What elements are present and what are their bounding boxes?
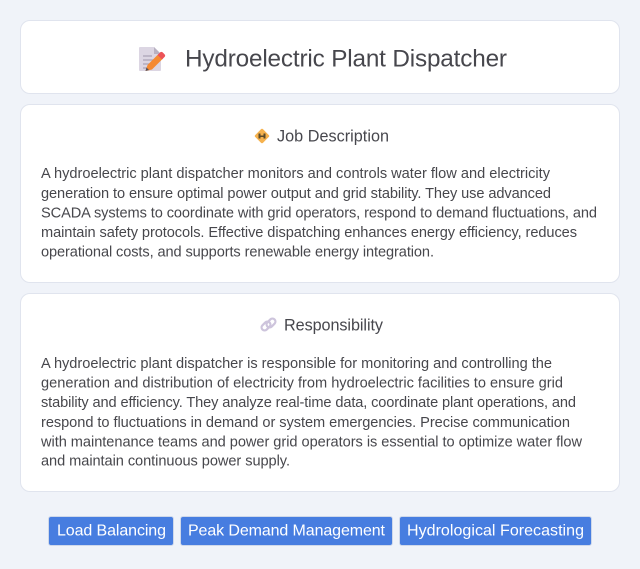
heading: responsibility: Responsibility xyxy=(284,316,384,334)
text: responsibility body: and maintain continuous power supply. xyxy=(41,454,290,470)
text: responsibility body: with maintenance teams and power grid operators is essential to optimize water flow xyxy=(40,434,582,450)
tag: hydrological forecasting background xyxy=(399,516,592,546)
tag label: load balancing: Load Balancing xyxy=(57,522,166,540)
tag: load balancing background xyxy=(48,516,174,546)
panel: responsibility card xyxy=(20,293,620,492)
text: job description body xyxy=(41,166,597,260)
tag: peak demand management background xyxy=(180,516,393,546)
tag label: peak demand management: Peak Demand Management xyxy=(188,522,386,540)
text: job description body: maintain safety protocols. Effective dispatching enhances energy efficiency, reduces xyxy=(41,225,577,241)
heading: job description: Job Description xyxy=(277,128,389,146)
tag label: hydrological forecasting: Hydrological Forecasting xyxy=(407,522,584,540)
icon: construction diamond xyxy=(254,128,270,144)
text: job description body: SCADA systems to coordinate with grid operators, respond to demand fluctuations, and xyxy=(41,206,597,222)
text: job description body: generation to ensure optimal power output and grid stability. They use advanced xyxy=(41,186,551,202)
panel: job description card xyxy=(20,104,620,283)
title: Hydroelectric Plant Dispatcher xyxy=(185,46,507,72)
text: responsibility body: respond to fluctuations in demand or system emergencies. Precise communication xyxy=(41,415,570,431)
text: responsibility body: generation and distribution of electricity from hydroelectric facilities to ensure grid xyxy=(41,376,563,392)
icon: document with pencil xyxy=(139,47,165,71)
text: job description body: A hydroelectric plant dispatcher monitors and controls water flow and electricity xyxy=(41,166,551,182)
panel: title card xyxy=(20,20,620,94)
text: responsibility body: A hydroelectric plant dispatcher is responsible for monitoring and controlling the xyxy=(41,356,552,372)
icon: chain link xyxy=(260,317,277,332)
text: responsibility body: stability and efficiency. They analyze real-time data, coordinate plant operations, and xyxy=(41,395,576,411)
text: job description body: operational costs, and supports renewable energy integration. xyxy=(41,244,434,260)
text: responsibility body xyxy=(40,356,582,470)
